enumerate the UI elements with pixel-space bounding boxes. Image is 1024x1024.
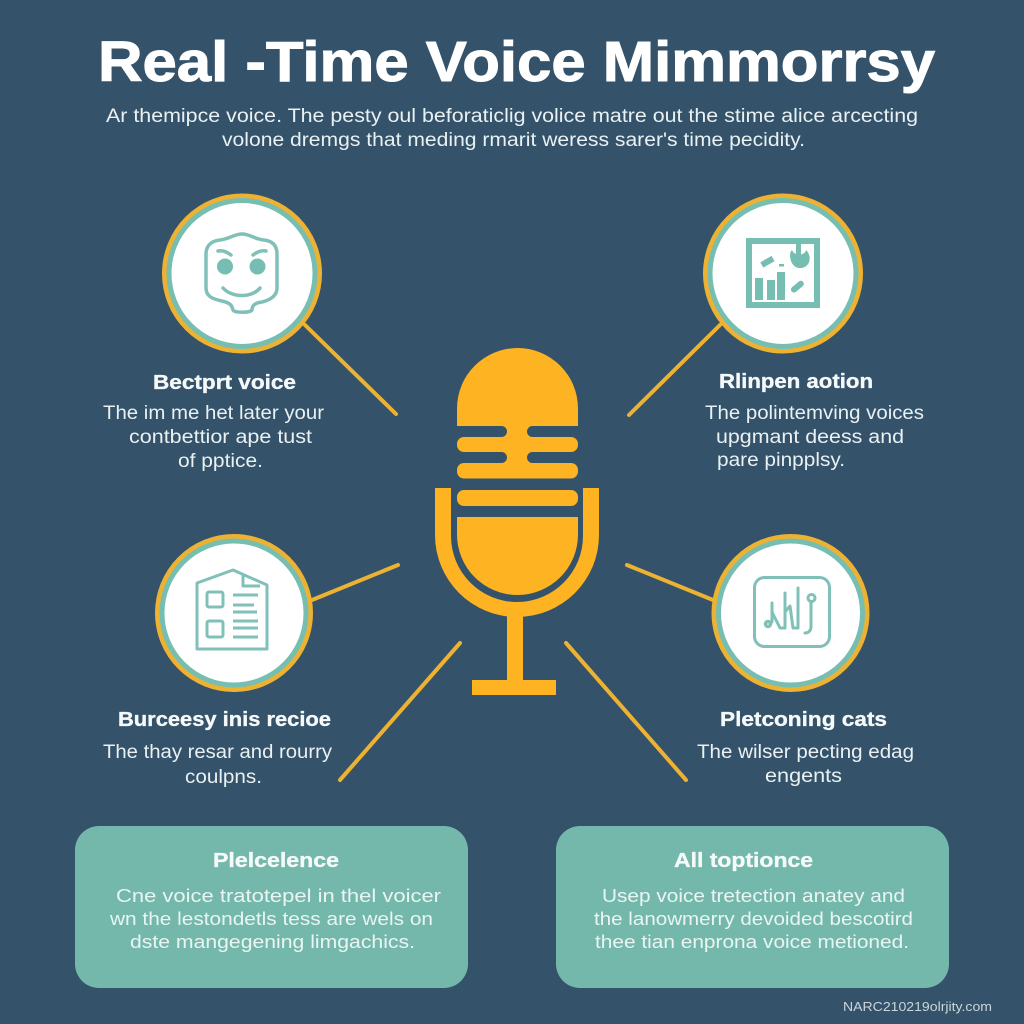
- heading: Bectprt voice: Bectprt voice: [153, 372, 296, 394]
- panel body: right: Usep voice tretection anatey and: [602, 885, 905, 906]
- connector lines: [305, 325, 720, 780]
- panel body: right: thee tian enprona voice metioned.: [595, 931, 909, 952]
- heading: Burceesy inis recioe: Burceesy inis recioe: [118, 709, 331, 731]
- text block: lower-right: [697, 709, 914, 787]
- subtitle: Ar themipce voice. The pesty oul beforaticlig volice matre out the stime alice arcecting: [106, 106, 918, 127]
- body: lower-right description: engents: [765, 766, 842, 787]
- body: top-left description: The im me het later your: [103, 403, 325, 424]
- item: lower-right circle with waveform icon: [714, 536, 867, 690]
- item: top-left circle with face icon: [164, 196, 320, 351]
- body: top-left description: of pptice.: [178, 451, 263, 472]
- panel body: left: Cne voice tratotepel in thel voicer: [116, 885, 441, 906]
- body: lower-left description: The thay resar and rourry: [103, 742, 333, 763]
- subtitle: [106, 106, 918, 151]
- panel heading: Plelcelence: Plelcelence: [213, 850, 339, 872]
- panel body: left: wn the lestondetls tess are wels on: [109, 908, 433, 929]
- icon: waveform: [754, 578, 830, 646]
- body: lower-left description: coulpns.: [185, 767, 262, 788]
- panel body: left: dste mangegening limgachics.: [130, 931, 415, 952]
- panel: Plelcelence: [75, 826, 468, 988]
- title: Real -Time Voice Mimmorrsy: [98, 30, 935, 94]
- central microphone icon: [435, 348, 599, 695]
- body: top-left description: contbettior ape tust: [129, 427, 313, 448]
- body: top-left description: [103, 403, 325, 472]
- panel: All toptionce: [556, 826, 949, 988]
- heading: Rlinpen aotion: Rlinpen aotion: [719, 371, 873, 393]
- icon: document: [197, 570, 267, 649]
- text block: top-left: [103, 372, 325, 472]
- body: top-right description: upgmant deess and: [716, 427, 904, 448]
- body: lower-right description: The wilser pecting edag: [697, 742, 914, 763]
- footer url: NARC210219olrjity.com: [843, 999, 992, 1014]
- body: top-right description: The polintemving voices: [705, 403, 924, 424]
- panel heading: All toptionce: All toptionce: [674, 850, 813, 872]
- subtitle: volone dremgs that meding rmarit weress sarer's time pecidity.: [222, 130, 805, 151]
- item: lower-left circle with document icon: [158, 536, 310, 690]
- panel body: right: the lanowmerry devoided bescotird: [594, 908, 913, 929]
- body: top-right description: pare pinpplsy.: [717, 450, 845, 471]
- text block: lower-left: [103, 709, 333, 788]
- text block: top-right: [705, 371, 924, 471]
- panel body: right: [594, 885, 913, 952]
- icon: robot face: [206, 234, 277, 312]
- icon: dashboard chart: [746, 238, 820, 308]
- body: top-right description: [705, 403, 924, 471]
- body: lower-right description: [697, 742, 914, 787]
- heading: Pletconing cats: Pletconing cats: [720, 709, 887, 731]
- item: top-right circle with chart icon: [706, 196, 860, 351]
- body: lower-left description: [103, 742, 333, 788]
- panel body: left: [109, 885, 441, 952]
